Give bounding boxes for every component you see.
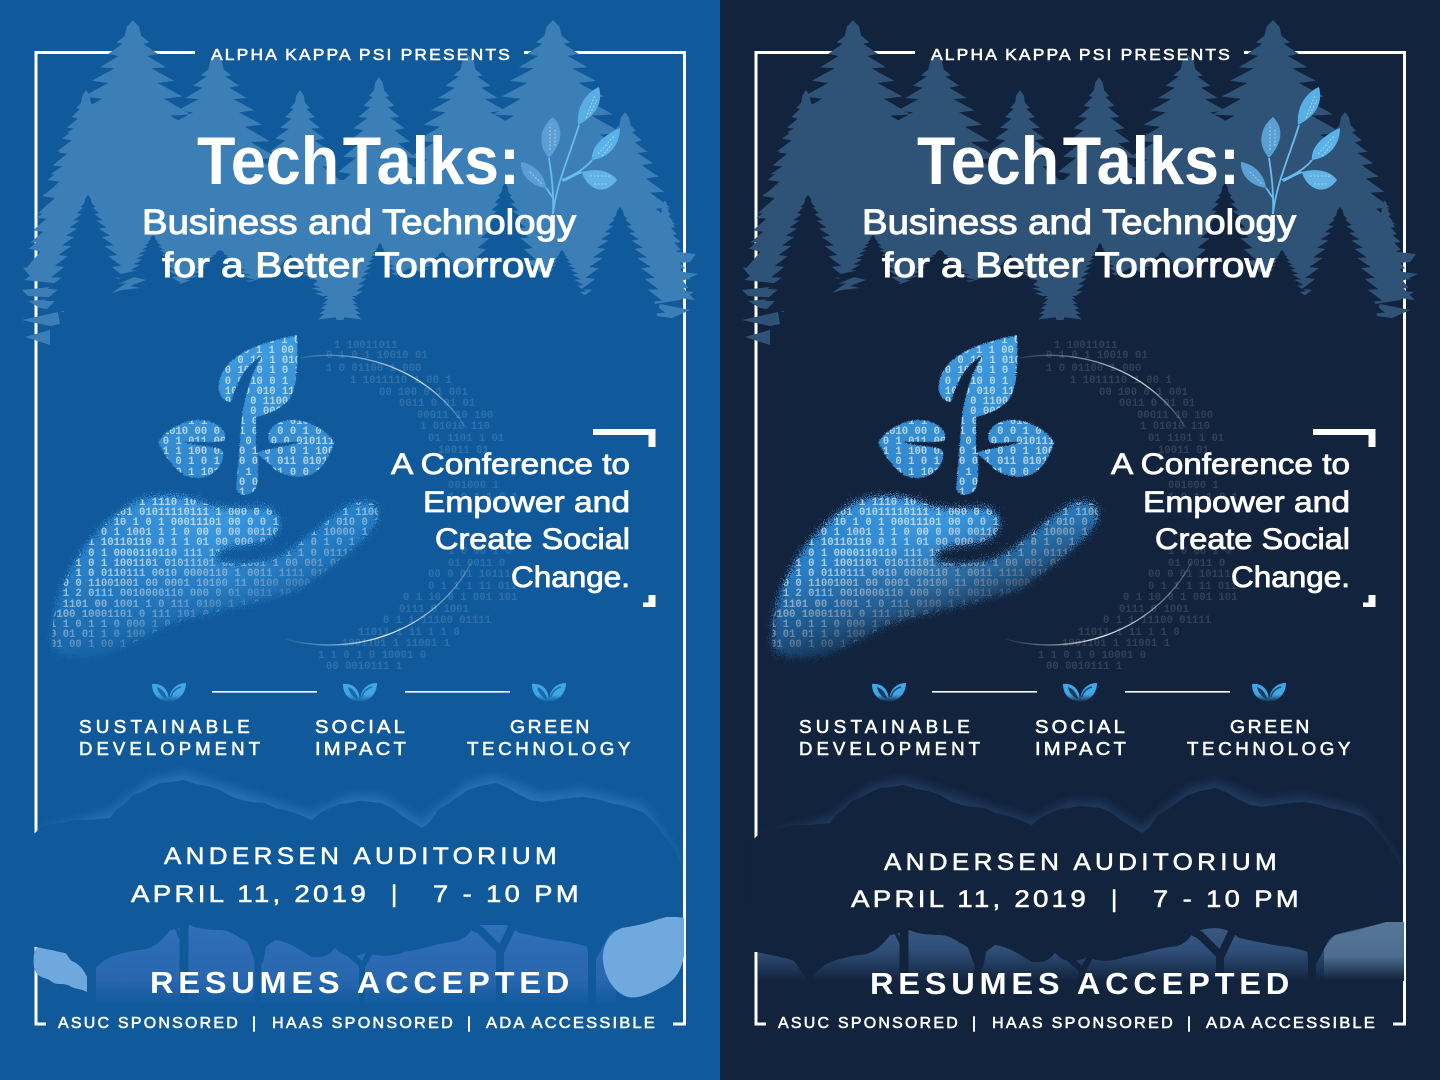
date and time xyxy=(851,886,1302,913)
label: green technology: GREEN xyxy=(1230,717,1312,737)
sponsors line xyxy=(778,1015,1377,1032)
label: social impact: IMPACT xyxy=(1035,739,1129,759)
label: sustainable development: DEVELOPMENT xyxy=(79,739,264,759)
forest: top pine trees xyxy=(742,20,1418,356)
sponsors line: ASUC SPONSORED xyxy=(778,1015,960,1032)
sponsors line: HAAS SPONSORED xyxy=(992,1015,1175,1032)
date and time: 7 - 10 PM xyxy=(433,881,582,908)
tagline xyxy=(391,448,630,594)
venue: ANDERSEN AUDITORIUM xyxy=(164,843,561,870)
frame xyxy=(36,52,684,1024)
bottom glow behind hills xyxy=(761,779,1396,906)
label: social impact: SOCIAL xyxy=(315,717,408,737)
sponsors line: | xyxy=(467,1015,471,1032)
icon: leaf social xyxy=(1063,683,1097,702)
label: sustainable development: DEVELOPMENT xyxy=(799,739,984,759)
date and time: APRIL 11, 2019 xyxy=(131,881,369,908)
date and time xyxy=(131,881,582,908)
subtitle line 1: Business and Technology xyxy=(142,203,577,242)
sponsors line xyxy=(58,1015,657,1032)
icon: binary leaf sprig xyxy=(521,87,620,214)
tagline: A Conference to xyxy=(391,448,630,481)
date and time: | xyxy=(391,881,397,908)
corner bracket top xyxy=(1313,429,1376,447)
icon: leaf green xyxy=(1252,683,1286,702)
hills and tree silhouettes xyxy=(753,785,1403,1005)
top label: ALPHA KAPPA PSI PRESENTS xyxy=(931,47,1232,64)
subtitle line 1: Business and Technology xyxy=(862,203,1297,242)
label: green technology: GREEN xyxy=(510,717,592,737)
tagline: Empower and xyxy=(423,486,630,519)
frame xyxy=(756,52,1404,1024)
light patch right xyxy=(603,915,684,997)
sponsors line: ADA ACCESSIBLE xyxy=(1206,1015,1377,1032)
title: Tech Talks: xyxy=(197,123,520,199)
lower forest background xyxy=(96,925,616,1005)
label: social impact xyxy=(315,717,409,759)
poster background xyxy=(0,0,720,1080)
label: sustainable development xyxy=(799,717,984,759)
icon: leaf sustainable xyxy=(872,683,906,702)
date and time: | xyxy=(1111,886,1117,913)
venue: ANDERSEN AUDITORIUM xyxy=(884,849,1281,876)
illustration: hand holding binary sprout xyxy=(50,335,518,673)
resumes accepted: RESUMES ACCEPTED xyxy=(150,965,574,1000)
corner bracket top xyxy=(593,429,656,447)
corner bracket bottom xyxy=(1363,595,1376,607)
tagline: Create Social xyxy=(435,523,630,556)
icon: leaf sustainable xyxy=(152,683,186,702)
tagline xyxy=(1111,448,1350,594)
tagline: Empower and xyxy=(1143,486,1350,519)
title: Tech Talks: xyxy=(917,123,1240,199)
label: sustainable development: SUSTAINABLE xyxy=(79,717,254,737)
connector 1 xyxy=(212,691,317,693)
connector 2 xyxy=(1125,691,1230,693)
subtitle line 2: for a Better Tomorrow xyxy=(162,246,555,285)
panel: blue poster xyxy=(0,0,720,1080)
panel: navy poster xyxy=(720,0,1440,1080)
label: sustainable development: SUSTAINABLE xyxy=(799,717,974,737)
corner bracket bottom xyxy=(643,595,656,607)
icon: leaf social xyxy=(343,683,377,702)
tagline: Change. xyxy=(1231,561,1350,594)
resumes accepted: RESUMES ACCEPTED xyxy=(870,966,1294,1001)
topics row xyxy=(79,683,634,759)
label: green technology xyxy=(1187,717,1354,759)
connector 1 xyxy=(932,691,1037,693)
sponsors line: | xyxy=(1187,1015,1191,1032)
bottom glow behind hills xyxy=(41,773,676,900)
subtitle line 2: for a Better Tomorrow xyxy=(882,246,1275,285)
sponsors line: ASUC SPONSORED xyxy=(58,1015,240,1032)
sponsors line: HAAS SPONSORED xyxy=(272,1015,455,1032)
icon: leaf green xyxy=(532,683,566,702)
tagline: A Conference to xyxy=(1111,448,1350,481)
forest: top pine trees xyxy=(22,20,698,356)
topics row xyxy=(799,683,1354,759)
label: green technology: TECHNOLOGY xyxy=(1187,739,1354,759)
label: social impact xyxy=(1035,717,1129,759)
sponsors line: ADA ACCESSIBLE xyxy=(486,1015,657,1032)
top label: ALPHA KAPPA PSI PRESENTS xyxy=(211,47,512,64)
date and time: APRIL 11, 2019 xyxy=(851,886,1089,913)
poster background xyxy=(720,0,1440,1080)
icon: binary leaf sprig xyxy=(1241,87,1340,214)
light patch left xyxy=(34,947,90,993)
connector 2 xyxy=(405,691,510,693)
label: green technology xyxy=(467,717,634,759)
label: social impact: SOCIAL xyxy=(1035,717,1128,737)
label: sustainable development xyxy=(79,717,264,759)
label: green technology: TECHNOLOGY xyxy=(467,739,634,759)
label: social impact: IMPACT xyxy=(315,739,409,759)
date and time: 7 - 10 PM xyxy=(1153,886,1302,913)
illustration: hand holding binary sprout xyxy=(770,335,1238,673)
tagline: Create Social xyxy=(1155,523,1350,556)
sponsors line: | xyxy=(972,1015,976,1032)
light patch right xyxy=(1324,920,1404,980)
sponsors line: | xyxy=(252,1015,256,1032)
lower forest background xyxy=(758,925,1404,981)
hills and tree silhouettes xyxy=(33,780,683,1000)
tagline: Change. xyxy=(511,561,630,594)
